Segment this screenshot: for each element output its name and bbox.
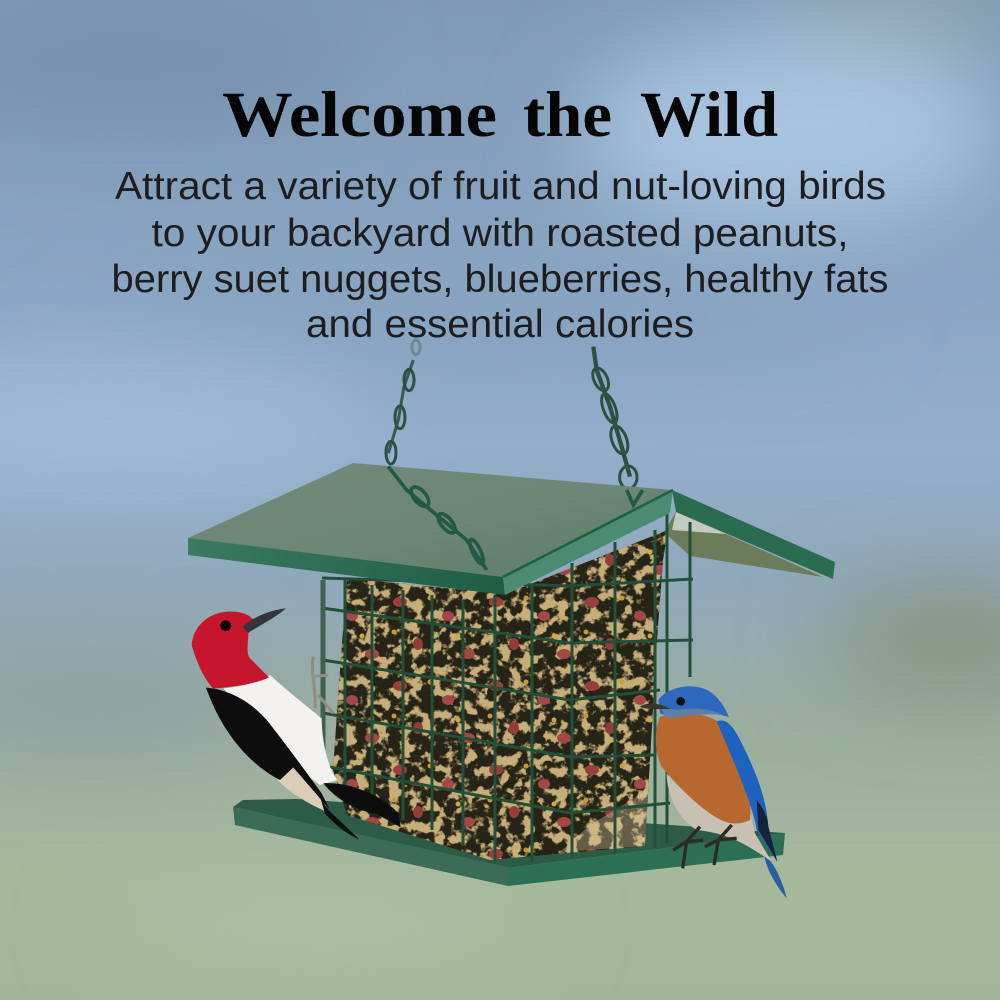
description text	[112, 165, 888, 346]
blue wing	[717, 721, 777, 862]
suet seed block	[333, 530, 668, 860]
description text: and essential calories	[306, 303, 694, 346]
red head	[192, 612, 269, 689]
woodpecker	[192, 608, 401, 839]
head	[658, 686, 729, 717]
feet	[312, 657, 333, 713]
description text: berry suet nuggets, blueberries, healthy fats	[112, 258, 888, 301]
orange breast	[656, 713, 750, 823]
tray	[233, 799, 785, 886]
belly	[667, 773, 772, 862]
description text: Attract a variety of fruit and nut-loving birds	[115, 165, 886, 208]
hanging chains	[386, 340, 637, 489]
tail	[323, 783, 401, 827]
roof shadow of chain	[388, 467, 643, 570]
wire cage	[322, 510, 693, 862]
roof right panel	[672, 490, 835, 579]
eye	[220, 620, 231, 631]
bluebird	[640, 686, 787, 898]
title: Wild	[640, 79, 778, 151]
title: the	[523, 79, 612, 151]
white body	[223, 675, 337, 785]
cream flank	[278, 762, 328, 812]
title	[222, 79, 778, 151]
feet	[673, 825, 737, 868]
beak	[243, 608, 286, 633]
title: Welcome	[222, 79, 497, 151]
black wing	[206, 688, 330, 810]
roof top panel	[188, 463, 673, 577]
roof gable edge	[503, 490, 673, 595]
roof front edge	[188, 538, 505, 595]
tail	[764, 855, 787, 898]
beak	[640, 704, 671, 709]
eye	[676, 697, 685, 706]
bird feeder	[188, 340, 835, 898]
roof underside	[664, 512, 823, 577]
description text: to your backyard with roasted peanuts,	[152, 212, 848, 255]
